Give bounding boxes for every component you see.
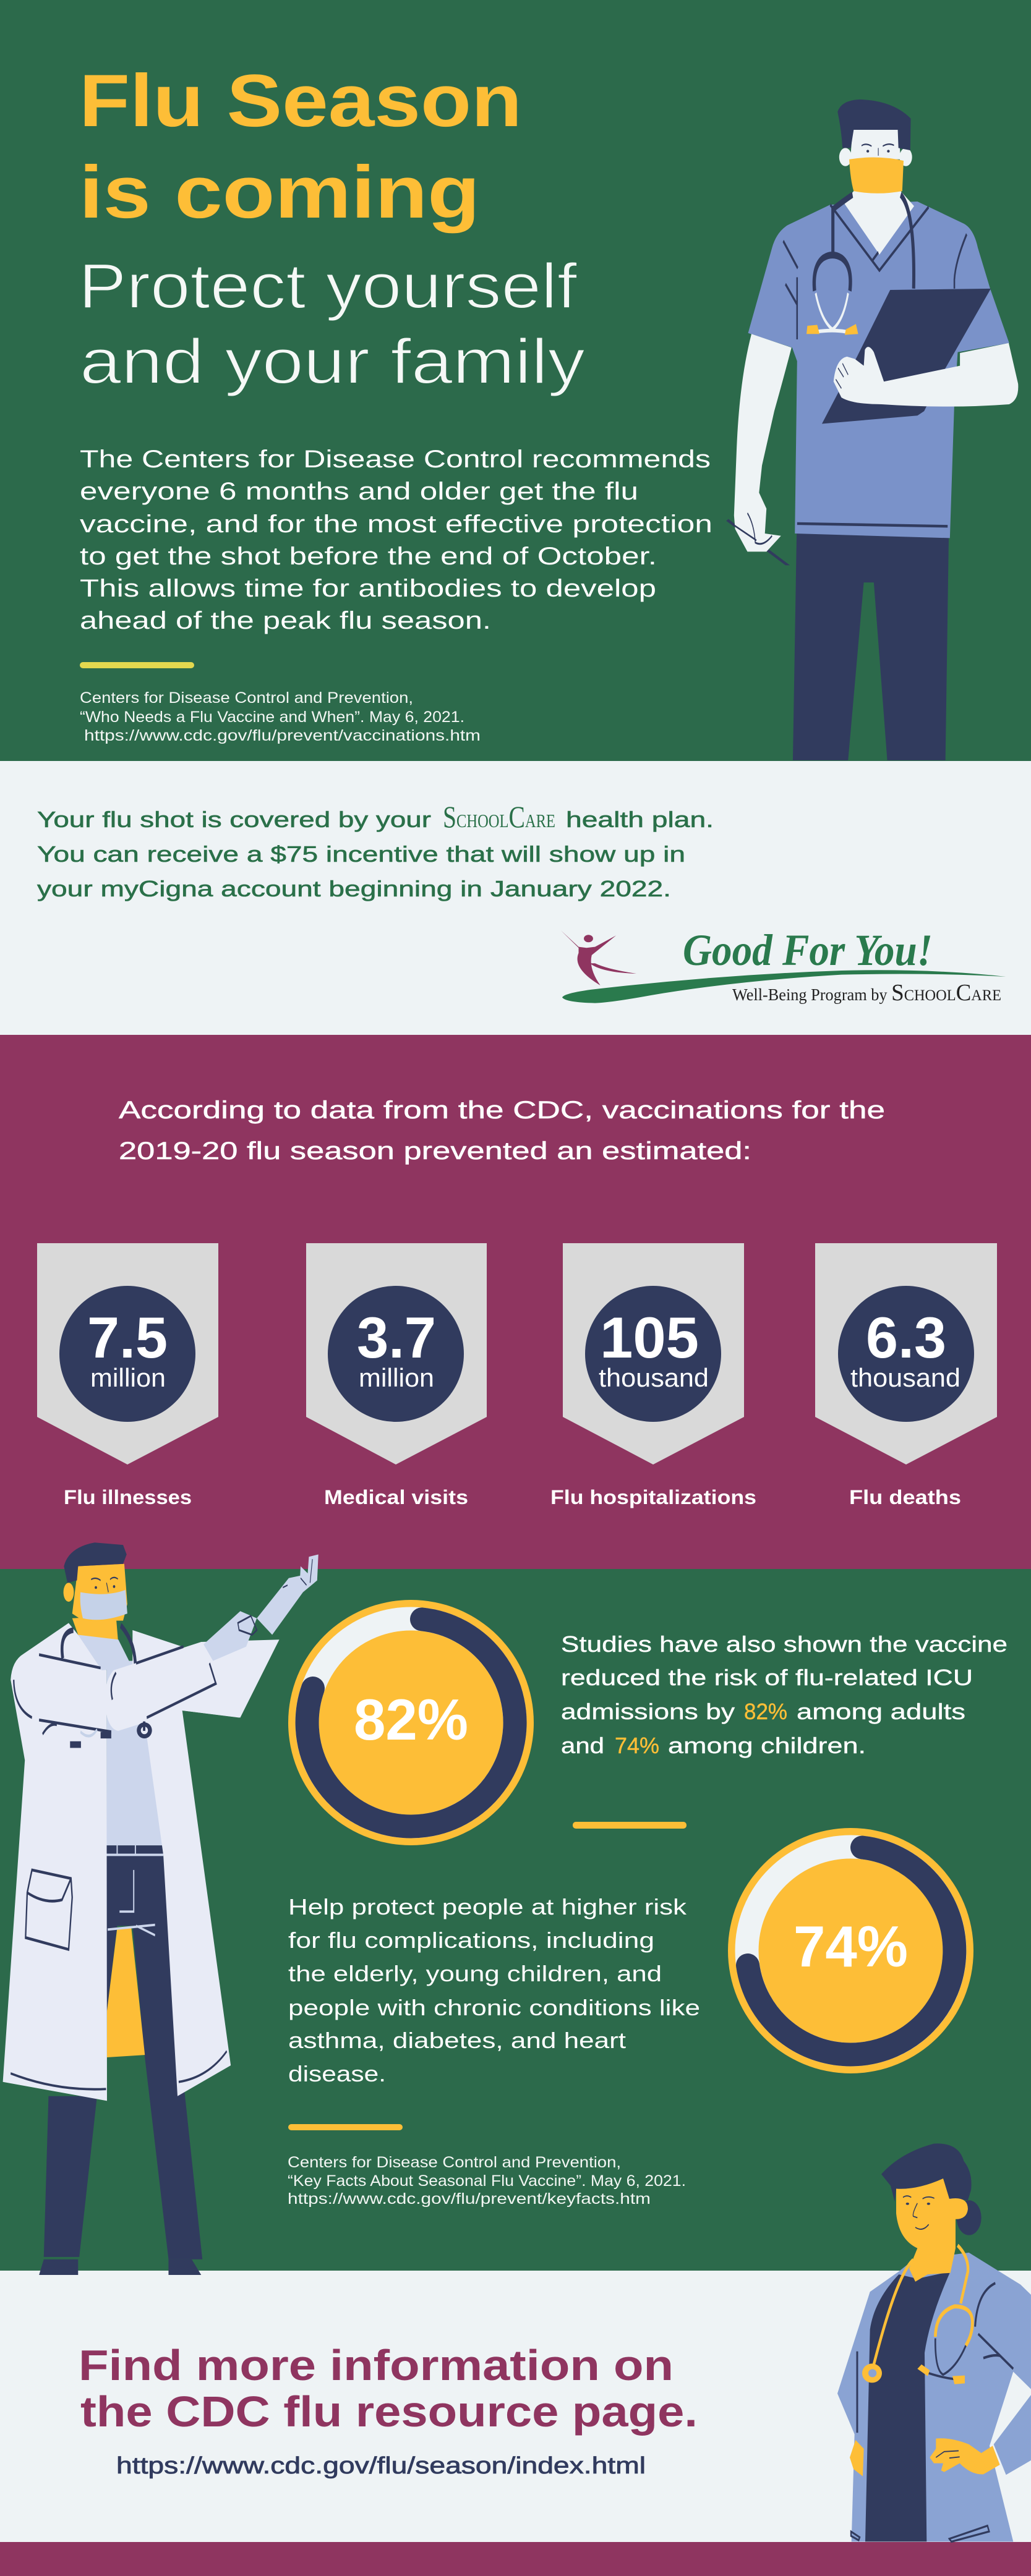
heading: CDC resource page: the CDC flu resource page. bbox=[80, 2387, 698, 2436]
text block: ICU admissions: and bbox=[561, 1733, 604, 1758]
logo: good for you bbox=[561, 925, 1006, 1006]
stat: flu hospitalizations: Flu hospitalizations bbox=[550, 1486, 756, 1508]
heading: CDC data intro bbox=[119, 1097, 885, 1165]
text block: ICU admissions bbox=[561, 1631, 1007, 1758]
text block: ICU admissions: 82% bbox=[744, 1699, 787, 1724]
illustration: female doctor with stethoscope bbox=[837, 2143, 1031, 2542]
stat: flu deaths: thousand bbox=[850, 1363, 960, 1392]
citation: who needs a flu vaccine: https://www.cdc.gov/flu/prevent/vaccinations.htm bbox=[84, 727, 481, 744]
subtitle: protect yourself and your family: and your family bbox=[80, 326, 586, 397]
logo: good for you: Good For You! bbox=[683, 925, 933, 975]
citation: key facts about seasonal flu vaccine: Centers for Disease Control and Prevention, bbox=[288, 2154, 621, 2171]
stat: flu deaths: Flu deaths bbox=[849, 1486, 961, 1508]
text block: higher risk people bbox=[288, 1894, 700, 2086]
footer band bbox=[0, 2542, 1031, 2576]
text block: ICU admissions: among adults bbox=[797, 1699, 965, 1724]
illustration: nurse with clipboard bbox=[726, 100, 1018, 760]
stat: flu hospitalizations bbox=[550, 1243, 756, 1508]
citation: key facts about seasonal flu vaccine: https://www.cdc.gov/flu/prevent/keyfacts.htm bbox=[288, 2190, 651, 2208]
divider bar bbox=[288, 2124, 403, 2130]
stat: medical visits: million bbox=[359, 1363, 434, 1392]
citation: key facts about seasonal flu vaccine bbox=[288, 2154, 686, 2208]
stat: flu illnesses: million bbox=[90, 1363, 166, 1392]
stat: medical visits: Medical visits bbox=[324, 1486, 468, 1508]
heading: CDC data intro: According to data from the CDC, vaccinations for the bbox=[119, 1097, 885, 1124]
heading: CDC data intro: 2019-20 flu season prevented an estimated: bbox=[119, 1137, 751, 1165]
text block: ICU admissions: among children. bbox=[668, 1733, 866, 1758]
text block: flu shot coverage: your myCigna account beginning in January 2022. bbox=[37, 876, 671, 901]
text block: higher risk people: asthma, diabetes, and heart bbox=[288, 2028, 626, 2053]
text block: CDC recommendation bbox=[80, 446, 712, 634]
text block: CDC recommendation: This allows time for antibodies to develop bbox=[80, 575, 656, 602]
text block: ICU admissions: Studies have also shown the vaccine bbox=[561, 1631, 1007, 1657]
icon: logo figure and swoosh bbox=[561, 930, 1006, 1003]
stat: flu illnesses: 7.5 bbox=[87, 1305, 168, 1370]
text block: higher risk people: disease. bbox=[288, 2061, 386, 2086]
text block: higher risk people: for flu complications, including bbox=[288, 1928, 654, 1953]
text block: ICU admissions: admissions by bbox=[561, 1699, 735, 1724]
donut chart: 74 percent bbox=[728, 1828, 973, 2073]
stat: flu deaths bbox=[815, 1243, 997, 1508]
text block: flu shot coverage bbox=[37, 799, 714, 901]
subtitle: protect yourself and your family bbox=[79, 250, 586, 397]
title: flu season is coming: Flu Season bbox=[79, 59, 522, 142]
text block: higher risk people: the elderly, young children, and bbox=[288, 1961, 662, 1986]
text block: flu shot coverage: SCHOOLCARE bbox=[443, 799, 555, 834]
subtitle: protect yourself and your family: Protect yourself bbox=[79, 250, 577, 321]
stat: flu deaths: 6.3 bbox=[866, 1305, 946, 1370]
citation: who needs a flu vaccine bbox=[80, 689, 481, 744]
title: flu season is coming: is coming bbox=[79, 151, 480, 234]
text block: flu shot coverage: You can receive a $75 incentive that will show up in bbox=[37, 841, 685, 867]
divider bar bbox=[80, 662, 194, 668]
text block: flu shot coverage: health plan. bbox=[566, 807, 714, 832]
text block: higher risk people: Help protect people at higher risk bbox=[288, 1894, 687, 1919]
title: flu season is coming bbox=[79, 59, 522, 234]
text block: flu shot coverage: Your flu shot is covered by your bbox=[37, 807, 431, 832]
heading: CDC resource page bbox=[79, 2341, 698, 2436]
stat: medical visits: 3.7 bbox=[357, 1305, 436, 1370]
donut chart: 82 percent bbox=[288, 1600, 534, 1845]
panel: vaccination impact statistics bbox=[0, 1035, 1031, 1569]
text block: CDC recommendation: vaccine, and for the most effective protection bbox=[80, 511, 712, 538]
text block: higher risk people: people with chronic conditions like bbox=[288, 1995, 700, 2020]
text block: CDC recommendation: The Centers for Disease Control recommends bbox=[80, 446, 711, 473]
stat: flu illnesses: Flu illnesses bbox=[64, 1486, 192, 1508]
citation: who needs a flu vaccine: “Who Needs a Flu Vaccine and When”. May 6, 2021. bbox=[80, 708, 464, 726]
text block: CDC recommendation: ahead of the peak flu season. bbox=[80, 607, 491, 634]
logo: good for you: Well-Being Program by SCHOOLCARE bbox=[732, 980, 1001, 1006]
citation: key facts about seasonal flu vaccine: “Key Facts About Seasonal Flu Vaccine”. May 6, 2021. bbox=[288, 2172, 686, 2190]
donut chart: 82 percent: 82% bbox=[354, 1687, 468, 1752]
text block: CDC recommendation: everyone 6 months and older get the flu bbox=[80, 478, 638, 505]
heading: CDC resource page: Find more information on bbox=[79, 2341, 674, 2389]
text block: CDC recommendation: to get the shot before the end of October. bbox=[80, 543, 657, 570]
panel: hero introduction bbox=[0, 0, 1031, 761]
stat: medical visits bbox=[306, 1243, 487, 1508]
text block: ICU admissions: reduced the risk of flu-related ICU bbox=[561, 1665, 973, 1690]
text block: ICU admissions: 74% bbox=[615, 1733, 659, 1758]
stat: flu hospitalizations: 105 bbox=[600, 1305, 699, 1370]
link: CDC flu season url: https://www.cdc.gov/flu/season/index.html bbox=[116, 2453, 646, 2479]
panel: risk reduction bbox=[0, 1569, 1031, 2271]
panel: find more information bbox=[0, 2271, 1031, 2542]
stat: flu hospitalizations: thousand bbox=[599, 1363, 709, 1392]
donut chart: 74 percent: 74% bbox=[794, 1914, 908, 1979]
stat: flu illnesses bbox=[37, 1243, 218, 1508]
divider bar bbox=[573, 1822, 687, 1829]
panel: health plan coverage bbox=[0, 761, 1031, 1035]
citation: who needs a flu vaccine: Centers for Disease Control and Prevention, bbox=[80, 689, 413, 707]
illustration: doctor in white coat bbox=[3, 1542, 319, 2275]
